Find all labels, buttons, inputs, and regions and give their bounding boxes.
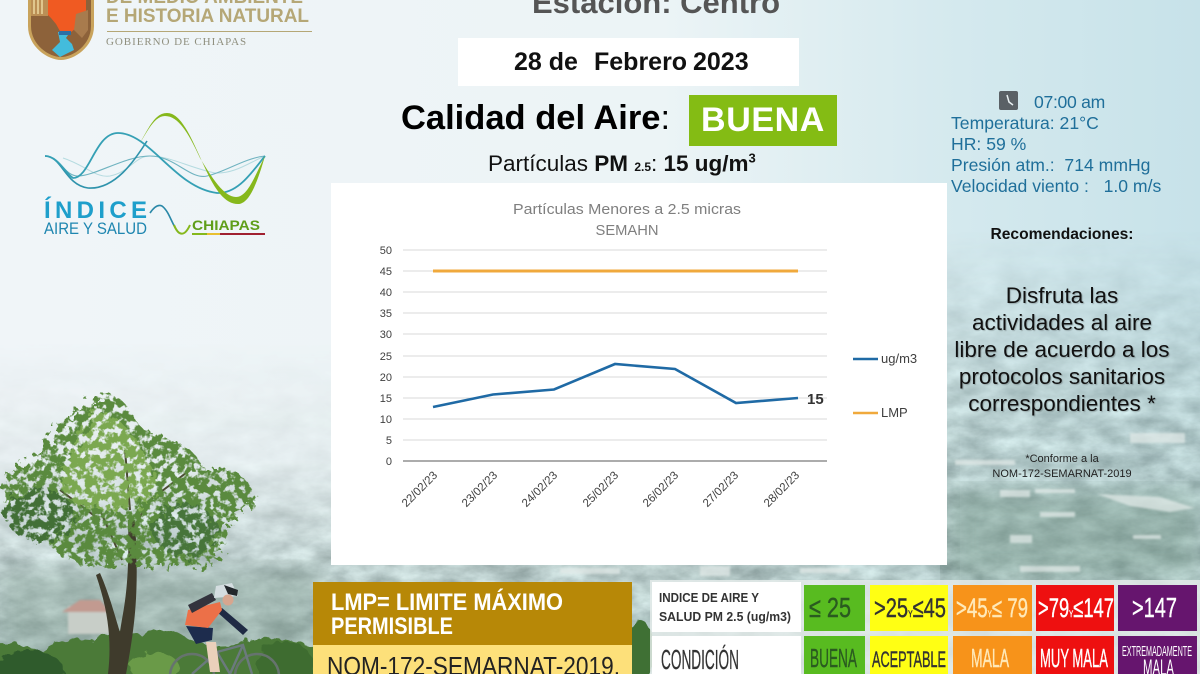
panel: index scale table — [650, 580, 1200, 674]
condition cell: red — [1036, 636, 1114, 674]
house in the distance — [62, 600, 110, 634]
chart title — [513, 201, 741, 239]
panel: LMP definition — [313, 582, 632, 674]
recommendations text — [954, 283, 1170, 417]
x axis labels: 24/02/23 — [520, 470, 560, 510]
logo: Gobierno de Chiapas shield — [28, 0, 94, 60]
icon: clock — [999, 91, 1018, 110]
logo waves — [45, 113, 265, 234]
logo: Índice Aire y Salud: ÍNDICE — [44, 196, 147, 224]
y axis labels: 45 — [380, 266, 392, 278]
cyclist — [170, 583, 279, 674]
logo text: Secretaría de Medio Ambiente — [106, 0, 312, 48]
panel: LMP definition: PERMISIBLE — [331, 613, 453, 640]
weather readings: 07:00 am — [1034, 92, 1105, 112]
range cell: red: >79Y≤147 — [1038, 593, 1114, 623]
x axis labels: 23/02/23 — [460, 470, 500, 510]
x axis labels: 26/02/23 — [641, 470, 681, 510]
condition cell: purple — [1118, 636, 1197, 674]
badge: BUENA: BUENA — [701, 101, 825, 139]
tree — [2, 393, 255, 674]
range cell: yellow — [870, 585, 948, 631]
row label: index: INDICE DE AIRE Y — [659, 590, 759, 605]
condition cell: red: MUY MALA — [1040, 643, 1108, 673]
legend — [853, 351, 917, 420]
logo: Índice Aire y Salud: AIRE Y SALUD — [44, 219, 147, 238]
y axis labels: 40 — [380, 287, 392, 299]
footnote: *Conforme a la — [1025, 453, 1099, 465]
condition cell: orange — [953, 636, 1032, 674]
city haze texture — [0, 230, 1200, 674]
index scale cells — [804, 585, 1197, 674]
y axis labels: 50 — [380, 245, 392, 257]
y axis labels: 15 — [380, 393, 392, 405]
x axis labels: 22/02/23 — [400, 470, 440, 510]
recommendations text: correspondientes * — [968, 391, 1156, 416]
x axis labels — [400, 470, 802, 510]
weather readings: Velocidad viento : 1.0 m/s — [951, 176, 1161, 196]
badge: BUENA — [689, 95, 837, 146]
condition cell: orange: MALA — [971, 643, 1009, 673]
panel: line chart — [331, 183, 947, 565]
air quality heading — [401, 95, 837, 146]
x axis labels: 25/02/23 — [581, 470, 621, 510]
ug/m3 line — [433, 364, 798, 407]
date box — [458, 38, 799, 86]
ground bushes — [0, 620, 654, 674]
chart title: SEMAHN — [596, 222, 658, 239]
date box: 2023 — [693, 48, 749, 76]
condition cell: green — [804, 636, 865, 674]
y axis labels: 30 — [380, 329, 392, 341]
logo: Índice Aire y Salud: CHIAPAS — [192, 217, 260, 233]
x axis labels: 27/02/23 — [701, 470, 741, 510]
range cell: purple — [1118, 585, 1197, 631]
recommendations text: Disfruta las — [1006, 283, 1118, 308]
data label: 15 — [807, 391, 824, 408]
row label: index — [652, 582, 801, 632]
row label: index: SALUD PM 2.5 (ug/m3) — [659, 609, 791, 624]
date box: Febrero — [594, 48, 687, 76]
air quality heading: Calidad del Aire: — [401, 99, 670, 137]
chart grid — [403, 250, 827, 440]
x axis labels: 28/02/23 — [762, 470, 802, 510]
condition cell: green: BUENA — [810, 643, 857, 673]
logo text: Secretaría de Medio Ambiente: GOBIERNO DE CHIAPAS — [106, 36, 247, 48]
range cell: green — [804, 585, 865, 631]
y axis labels: 0 — [386, 456, 392, 468]
weather readings: Presión atm.: 714 mmHg — [951, 155, 1150, 175]
date box: 28 de — [514, 48, 578, 76]
recommendations text: libre de acuerdo a los — [954, 337, 1170, 362]
row label: condition — [652, 636, 801, 674]
LMP line — [433, 270, 798, 272]
range cell: green: ≤ 25 — [809, 592, 851, 623]
range cell: orange — [953, 585, 1032, 631]
range cell: red — [1036, 585, 1114, 631]
logo: Índice Aire y Salud — [44, 113, 266, 238]
recommendations text: protocolos sanitarios — [959, 364, 1165, 389]
range cell: orange: >45Y≤ 79 — [956, 593, 1028, 623]
y axis labels: 5 — [386, 435, 392, 447]
y axis labels: 25 — [380, 351, 392, 363]
recommendations heading: Recomendaciones: — [990, 226, 1134, 243]
y axis labels: 10 — [380, 414, 392, 426]
chart title: Partículas Menores a 2.5 micras — [513, 201, 741, 218]
logo text: Secretaría de Medio Ambiente: E HISTORIA NATURAL — [106, 5, 309, 27]
y axis labels — [380, 245, 392, 468]
legend: ug/m3 — [881, 351, 917, 366]
condition cell: yellow — [870, 636, 948, 674]
footnote: NOM-172-SEMARNAT-2019 — [992, 468, 1132, 480]
weather readings: Temperatura: 21°C — [951, 113, 1099, 133]
recommendations text: actividades al aire — [972, 310, 1152, 335]
range cell: purple: >147 — [1132, 592, 1177, 623]
footnote — [992, 453, 1132, 480]
weather readings — [951, 91, 1161, 196]
PM 2.5 reading: Partículas PM 2.5: 15 ug/m3 — [488, 150, 756, 176]
weather readings: HR: 59 % — [951, 134, 1026, 154]
condition cell: yellow: ACEPTABLE — [872, 647, 946, 672]
y axis labels: 20 — [380, 372, 392, 384]
legend: LMP — [881, 405, 908, 420]
range cell: yellow: >25Y≤45 — [874, 593, 946, 623]
y axis labels: 35 — [380, 308, 392, 320]
panel: LMP definition: LMP= LIMITE MÁXIMO — [331, 588, 563, 616]
